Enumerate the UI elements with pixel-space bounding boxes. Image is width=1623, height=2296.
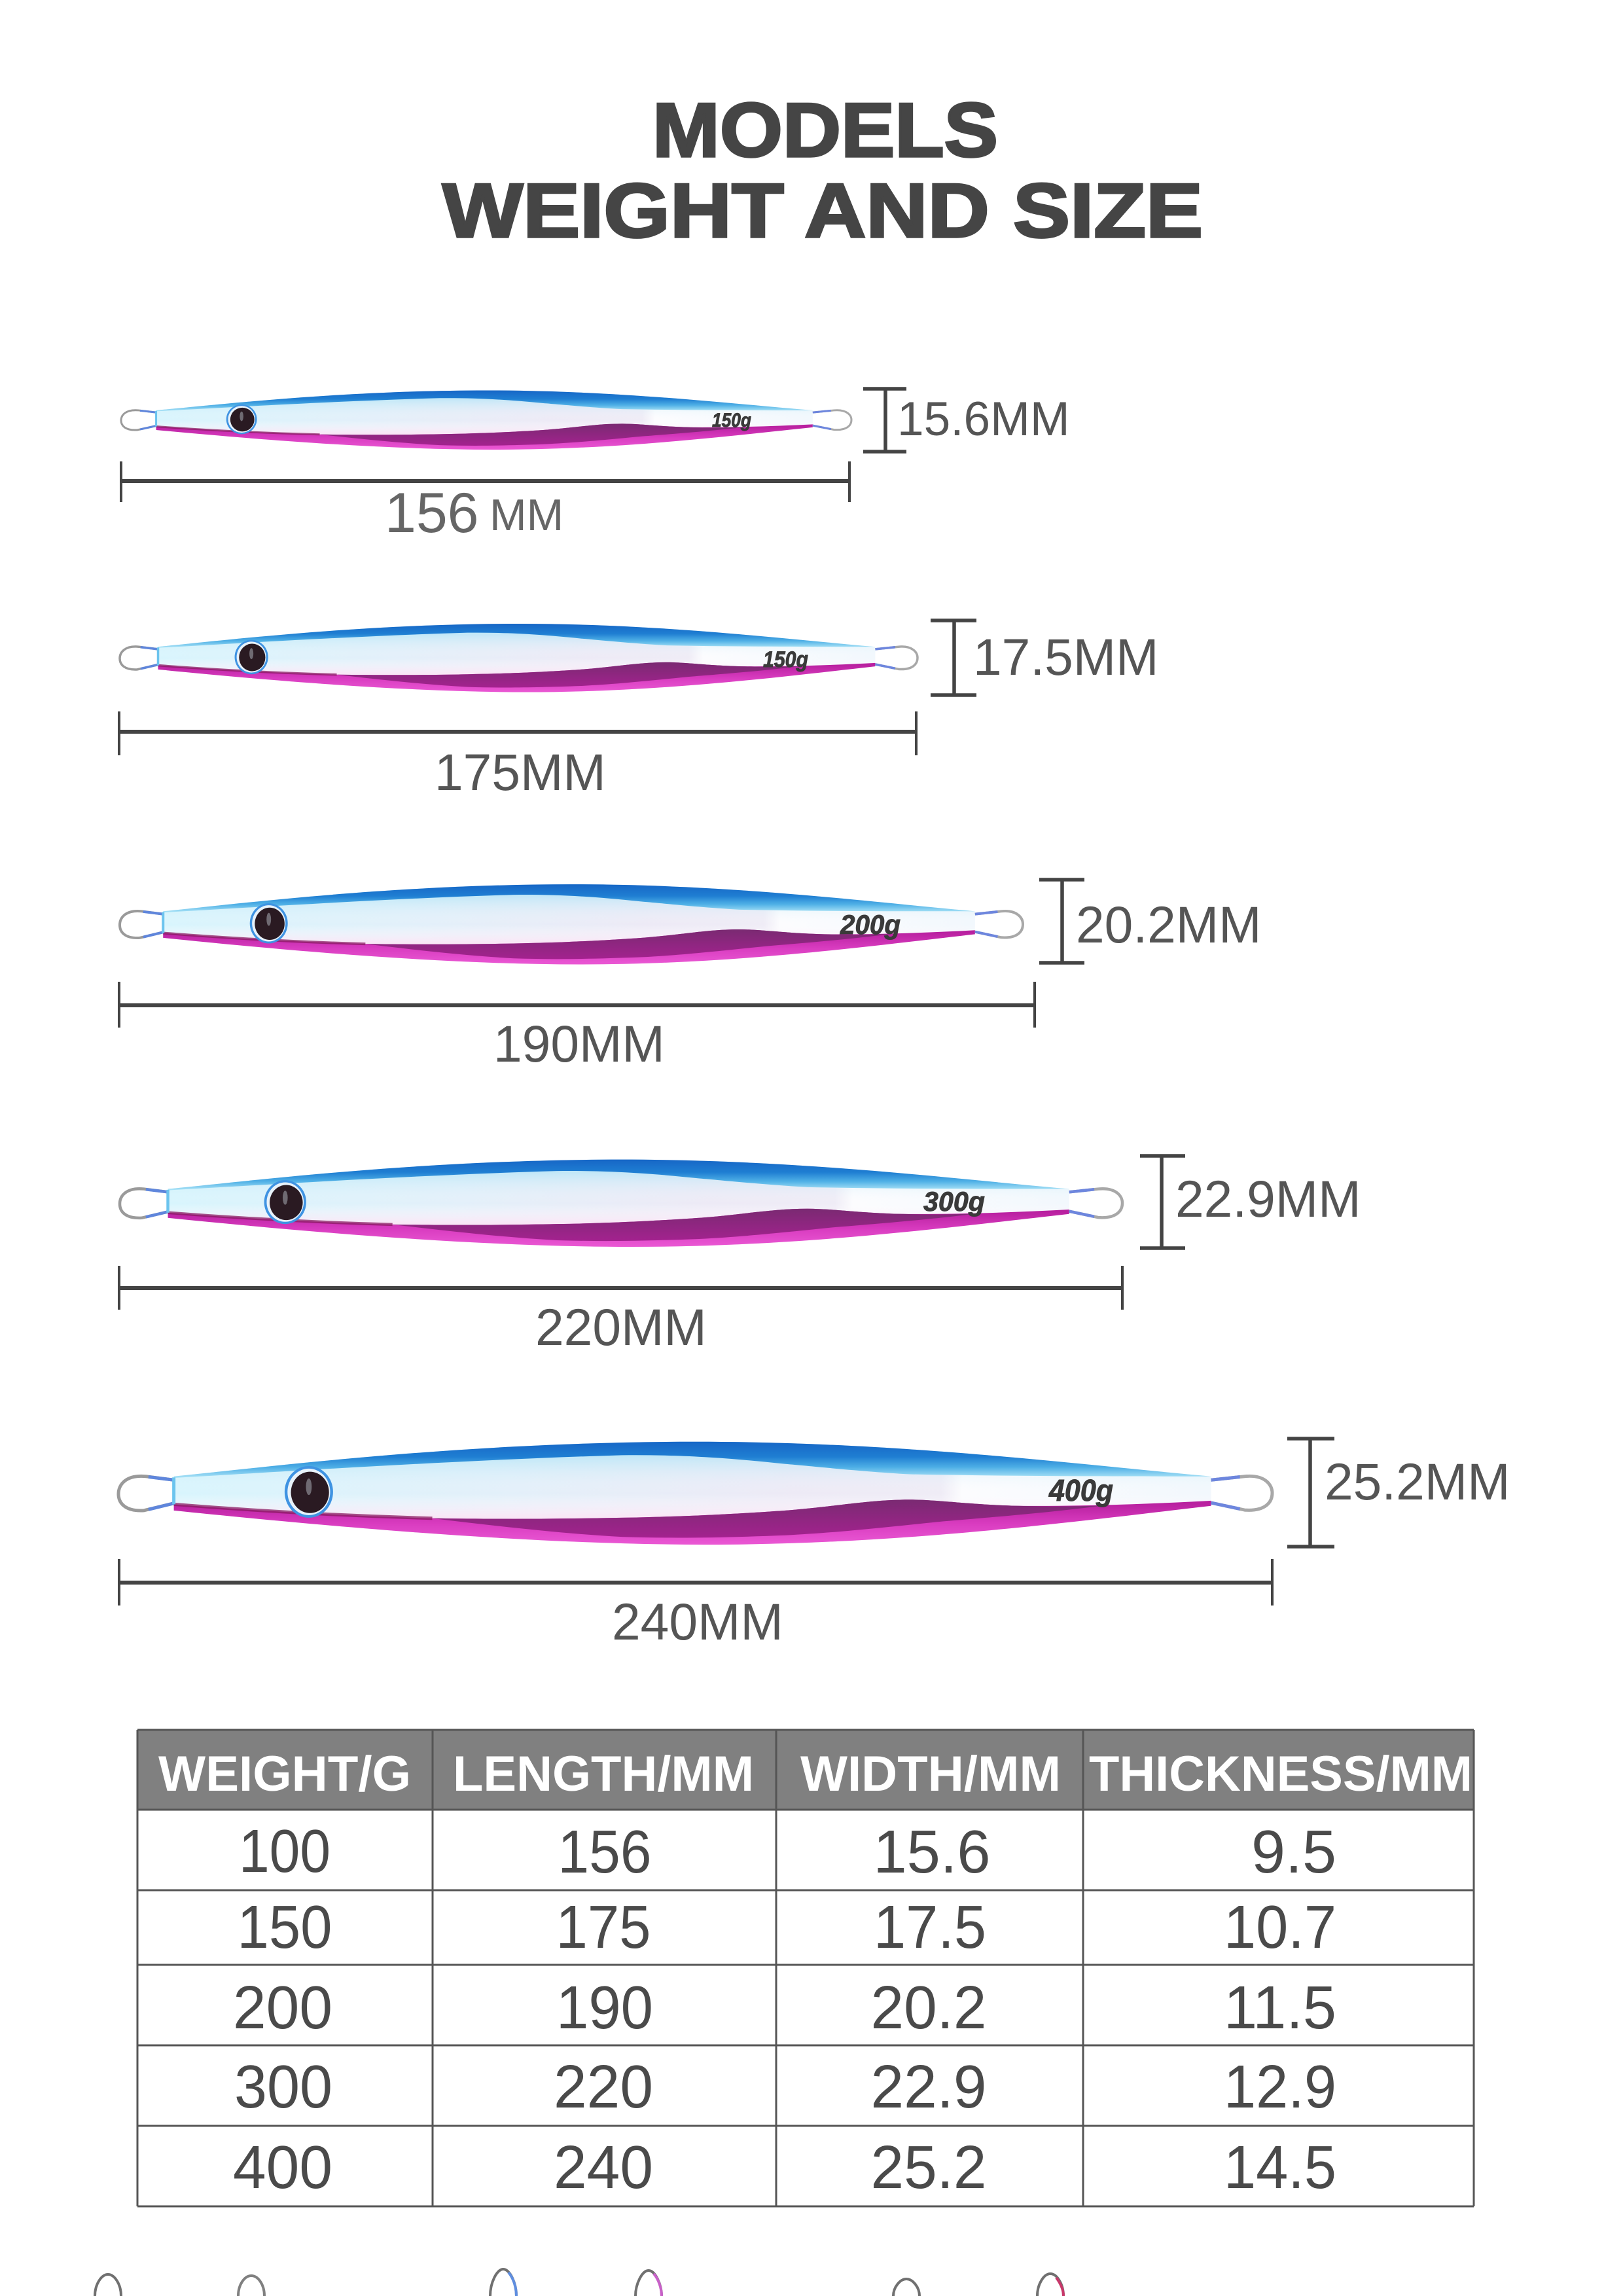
length ticks 3 <box>119 982 1035 1028</box>
row: 400 g <box>233 2133 1336 2201</box>
row: 150 g <box>237 1893 1336 1961</box>
row: 300 g <box>234 2053 1336 2121</box>
table header row: THICKNESS/MM <box>1089 1746 1472 1802</box>
model 5: 400g lure, dimensions <box>118 1439 1510 1651</box>
length dimension line 2 <box>119 730 916 734</box>
row: 150 g: 150 <box>237 1893 332 1961</box>
length label 1: 156 <box>385 482 479 545</box>
model 4: 300g lure, dimensions <box>119 1156 1361 1356</box>
table header row: WIDTH/MM <box>800 1746 1061 1802</box>
row: 200 g: 20.2 <box>870 1973 987 2041</box>
width label 1: 15.6MM <box>897 393 1070 446</box>
row: 400 g: 25.2 <box>870 2133 987 2201</box>
row: 100 g: 15.6 <box>873 1818 991 1886</box>
length ticks 1 <box>121 461 849 502</box>
lure image 5 <box>118 1442 1272 1545</box>
width label 5: 25.2MM <box>1325 1453 1510 1511</box>
row: 200 g <box>233 1973 1336 2041</box>
width dimension bracket 3 <box>1039 880 1084 963</box>
row: 400 g: 400 <box>233 2133 332 2201</box>
row: 200 g: 190 <box>556 1973 653 2041</box>
row: 300 g: 12.9 <box>1224 2053 1336 2121</box>
model 3: 200g lure, dimensions <box>119 880 1262 1073</box>
row: 150 g: 175 <box>556 1893 651 1961</box>
title <box>442 87 1203 253</box>
length ticks 2 <box>119 711 916 755</box>
width dimension bracket 5 <box>1287 1439 1334 1547</box>
width label 4: 22.9MM <box>1175 1170 1361 1228</box>
length dimension line 3 <box>119 1003 1035 1007</box>
table header row <box>137 1730 1474 1810</box>
row: 300 g: 220 <box>554 2053 653 2121</box>
specification table <box>137 1730 1474 2206</box>
row: 150 g: 10.7 <box>1224 1893 1336 1961</box>
lure image 1 <box>121 390 851 450</box>
lure stamp 2: 150g <box>763 647 808 672</box>
length label 2: 175MM <box>435 744 606 801</box>
row: 200 g: 11.5 <box>1224 1973 1336 2041</box>
length dimension line 4 <box>119 1286 1122 1290</box>
row: 400 g: 240 <box>554 2133 653 2201</box>
row: 300 g: 22.9 <box>870 2053 987 2121</box>
row: 100 g: 100 <box>239 1817 330 1885</box>
lure image 3 <box>120 884 1023 965</box>
row: 300 g: 300 <box>234 2053 332 2121</box>
hook rings cropped at the bottom edge <box>95 2269 1063 2296</box>
row: 100 g: 156 <box>558 1818 652 1886</box>
lure stamp 1: 150g <box>712 410 751 431</box>
row: 150 g: 17.5 <box>874 1893 986 1961</box>
length dimension line 5 <box>119 1581 1272 1585</box>
lure stamp 5: 400g <box>1048 1473 1113 1507</box>
length label 4: 220MM <box>535 1299 707 1356</box>
length ticks 4 <box>119 1266 1122 1310</box>
length label 1: MM <box>490 490 563 540</box>
lure image 2 <box>120 624 918 692</box>
length ticks 5 <box>119 1559 1272 1605</box>
width dimension bracket 1 <box>863 389 906 452</box>
table header row: WEIGHT/G <box>158 1746 411 1802</box>
title: WEIGHT AND SIZE <box>442 168 1203 253</box>
row: 100 g: 9.5 <box>1251 1818 1336 1886</box>
table header row: LENGTH/MM <box>453 1746 754 1802</box>
title: MODELS <box>652 87 998 173</box>
row: 100 g <box>239 1817 1336 1886</box>
table grid lines <box>137 1730 1474 2206</box>
width label 3: 20.2MM <box>1076 896 1262 954</box>
row: 200 g: 200 <box>233 1973 332 2041</box>
model 2: 150g lure, dimensions <box>119 620 1159 801</box>
width dimension bracket 2 <box>931 620 976 695</box>
length label 3: 190MM <box>493 1015 665 1073</box>
lure stamp 4: 300g <box>923 1186 985 1217</box>
length label 5: 240MM <box>612 1593 783 1651</box>
length dimension line 1 <box>121 479 849 483</box>
width label 2: 17.5MM <box>973 628 1159 686</box>
width dimension bracket 4 <box>1140 1156 1185 1248</box>
lure stamp 3: 200g <box>840 909 901 940</box>
lure image 4 <box>120 1160 1122 1247</box>
model 1: 100g lure, dimensions <box>121 389 1070 545</box>
row: 400 g: 14.5 <box>1224 2133 1336 2201</box>
